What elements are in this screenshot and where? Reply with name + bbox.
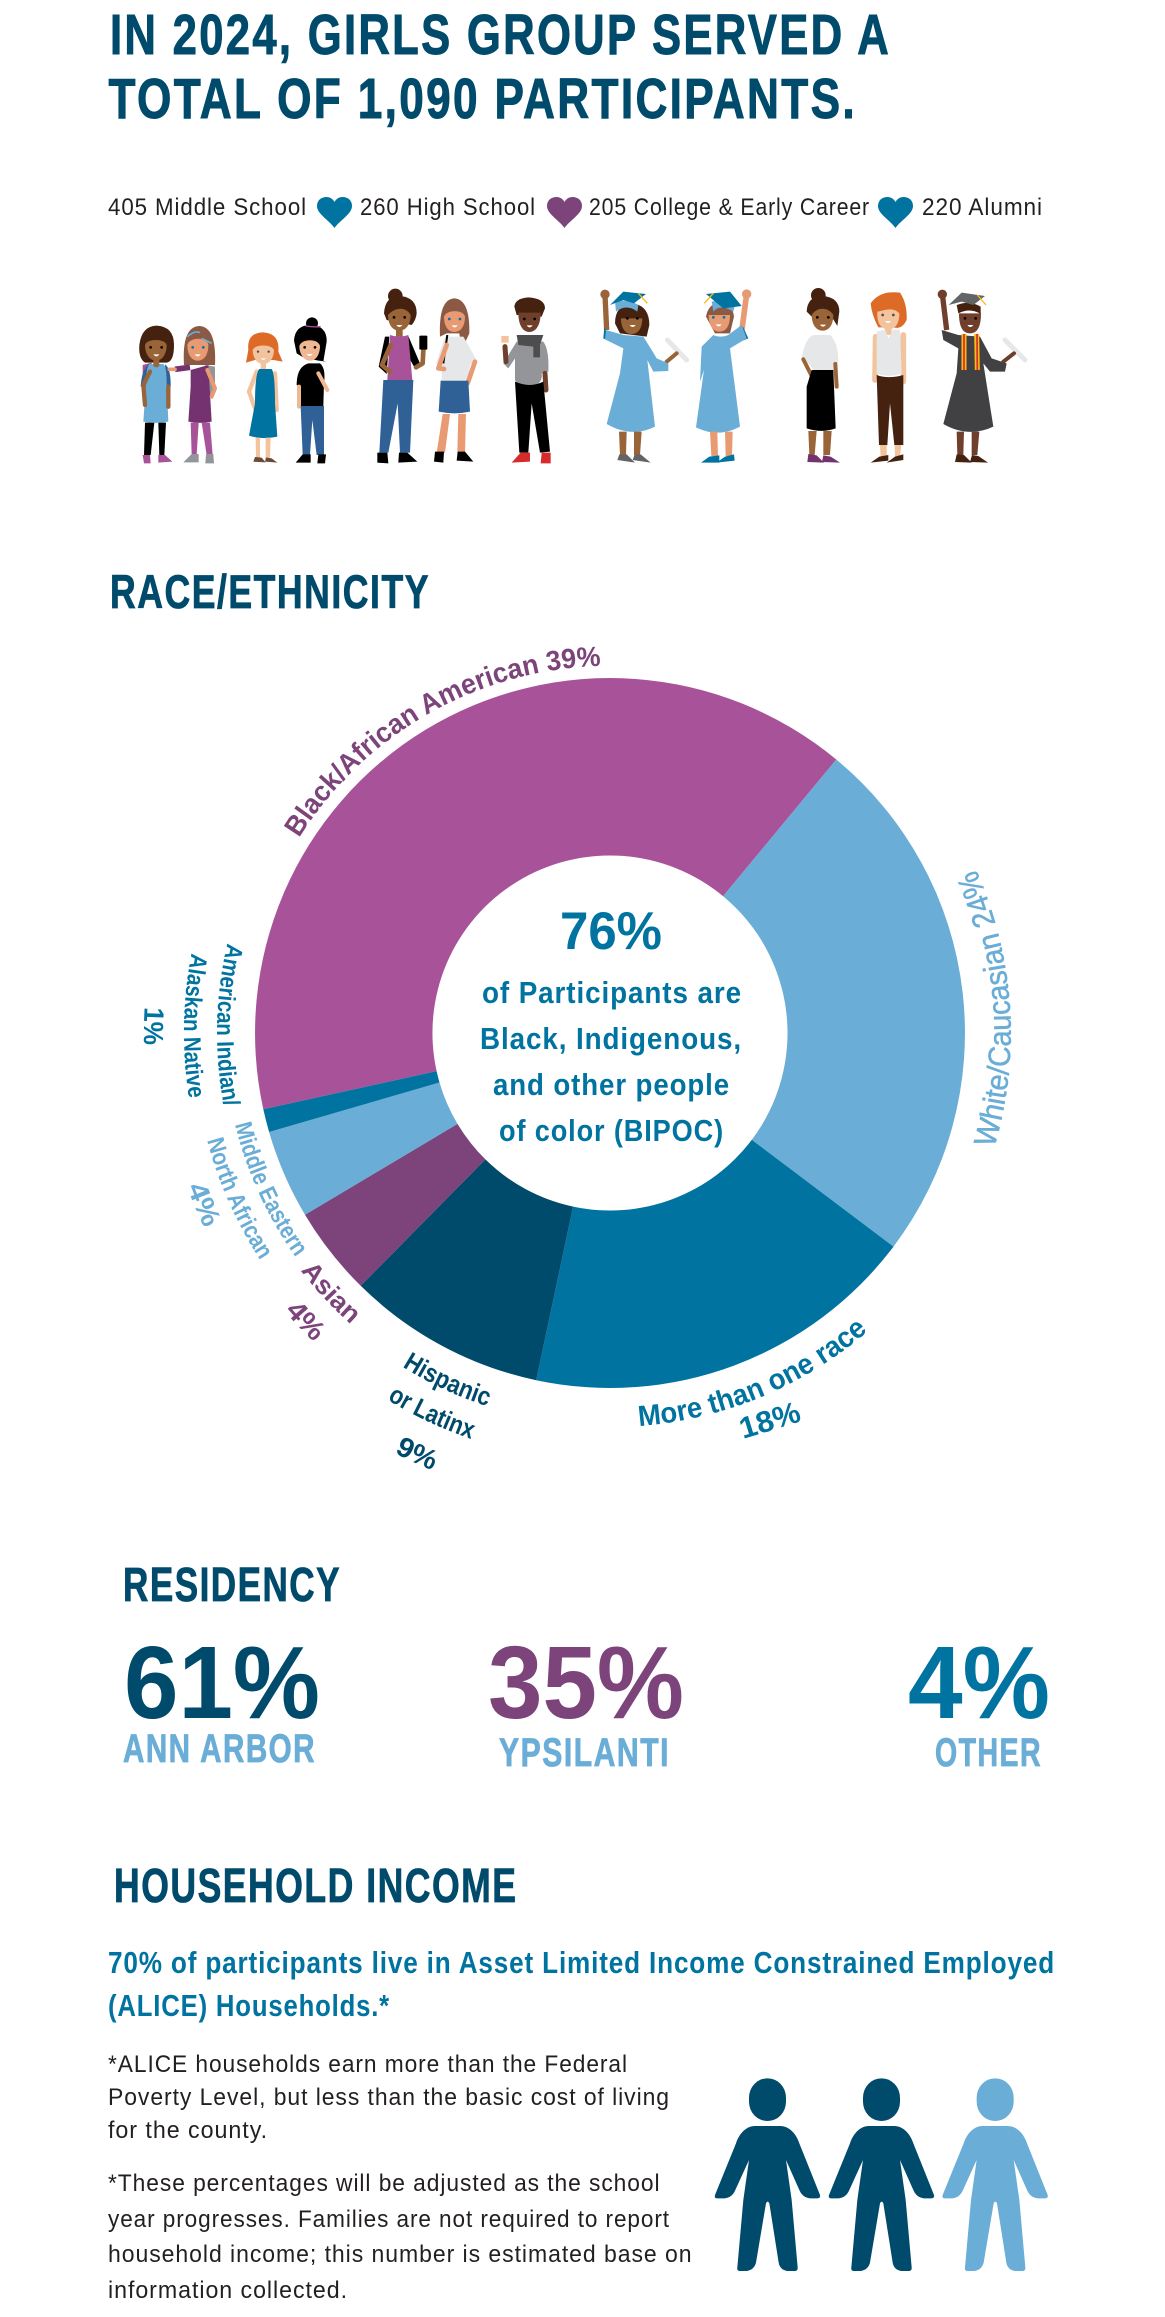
figure: alumna with orange hair xyxy=(871,292,907,463)
stat: Other 4%: 4% xyxy=(908,1625,1050,1740)
ALICE statement: (ALICE) Households.* xyxy=(108,1988,390,2023)
label: Hispanic or Latinx 9%: 9% xyxy=(397,1438,436,1469)
illustration: group of twelve participants xyxy=(139,288,1025,463)
label: Middle Eastern North African 4% xyxy=(190,1122,304,1260)
note: ALICE definition: Poverty Level, but less than the basic cost of living xyxy=(108,2084,670,2111)
segment: More than one race 18% xyxy=(536,1140,894,1388)
figure: teen in gray top and red shoes xyxy=(501,297,551,463)
count: alumni: 220 Alumni xyxy=(922,194,1043,221)
donut centre callout: of Participants are xyxy=(482,975,742,1010)
note: ALICE definition: *ALICE households earn more than the Federal xyxy=(108,2051,628,2078)
note: percentages disclaimer: *These percentages will be adjusted as the school xyxy=(108,2170,660,2197)
figure: alumna in black skirt xyxy=(802,288,840,463)
label: American Indian/Alaskan Native 1%: American Indian/ xyxy=(216,944,242,1104)
segment: Middle Eastern North African 4% xyxy=(269,1082,458,1215)
donut centre callout: of color (BIPOC) xyxy=(499,1113,724,1148)
icon: person dark xyxy=(829,2078,934,2271)
chart: race/ethnicity donut xyxy=(255,678,965,1388)
label: White/Caucasian 24%: White/Caucasian 24% xyxy=(958,872,1012,1143)
label: Hispanic or Latinx 9% xyxy=(390,1352,490,1469)
count: middle school: 405 Middle School xyxy=(108,194,307,221)
label: Middle Eastern North African 4%: Middle Eastern xyxy=(235,1122,304,1256)
figures: college graduates and alumni xyxy=(600,288,1025,463)
figure: girl in purple dress xyxy=(169,326,215,463)
icon: person dark xyxy=(715,2078,820,2271)
ALICE statement xyxy=(108,1945,1055,2023)
note: percentages disclaimer: information collected. xyxy=(108,2277,348,2304)
stat: Ann Arbor 61%: 61% xyxy=(124,1625,320,1740)
stat: Ann Arbor 61%: ANN ARBOR xyxy=(123,1727,316,1771)
stat: Ypsilanti 35%: YPSILANTI xyxy=(499,1731,670,1775)
heading: race/ethnicity: RACE/ETHNICITY xyxy=(110,565,430,618)
label: American Indian/Alaskan Native 1% xyxy=(144,944,242,1104)
icon: plum heart xyxy=(547,197,582,228)
heading: residency: RESIDENCY xyxy=(123,1559,341,1612)
title: IN 2024, GIRLS GROUP SERVED A xyxy=(110,3,891,67)
icon: teal heart xyxy=(317,197,352,228)
donut centre callout: and other people xyxy=(493,1067,730,1102)
donut centre callout: 76% xyxy=(560,902,662,961)
title xyxy=(108,3,891,131)
note: percentages disclaimer: year progresses. Families are not required to report xyxy=(108,2206,670,2233)
note: percentages disclaimer xyxy=(108,2170,692,2304)
segment: American Indian/Alaskan Native 1% xyxy=(263,1071,440,1132)
icon: teal heart xyxy=(878,197,913,228)
segment: White/Caucasian 24% xyxy=(723,760,965,1247)
figure: girl in black top and jeans xyxy=(294,317,327,463)
heading: household income: HOUSEHOLD INCOME xyxy=(114,1860,518,1913)
label: More than one race 18%: 18% xyxy=(735,1396,804,1446)
figure: graduate with raised arm xyxy=(696,289,751,463)
figure: graduate in dark gown xyxy=(938,290,1025,463)
label: More than one race 18%: More than one race xyxy=(638,1322,866,1426)
participant counts legend xyxy=(108,194,1043,228)
figure: girl in teal dress xyxy=(246,332,283,463)
count: college and early career: 205 College & Early Career xyxy=(589,194,870,221)
stat: Ypsilanti 35%: 35% xyxy=(488,1625,684,1740)
label: Hispanic or Latinx 9%: Hispanic xyxy=(404,1352,490,1405)
count: high school: 260 High School xyxy=(360,194,536,221)
figure: teen in white shirt and blue skirt xyxy=(434,298,477,463)
label: American Indian/Alaskan Native 1%: 1% xyxy=(144,1008,164,1044)
label: Hispanic or Latinx 9%: or Latinx xyxy=(390,1390,476,1439)
figure: graduate in light blue gown xyxy=(600,290,687,463)
note: percentages disclaimer: household income; this number is estimated base on xyxy=(108,2241,692,2268)
donut centre callout xyxy=(480,902,742,1148)
label: American Indian/Alaskan Native 1%: Alaskan Native xyxy=(184,954,207,1098)
label: Middle Eastern North African 4%: North African xyxy=(207,1137,270,1260)
title: TOTAL OF 1,090 PARTICIPANTS. xyxy=(108,67,857,131)
figure: teen in purple shirt with phone xyxy=(377,289,427,463)
label: Asian 4%: Asian xyxy=(301,1265,358,1324)
label: Black/African American 39%: Black/African American 39% xyxy=(284,646,600,836)
figure: girl in light blue dress xyxy=(139,326,174,463)
figures: middle and high school xyxy=(139,289,551,463)
donut centre callout: Black, Indigenous, xyxy=(480,1021,742,1056)
stat: Other 4%: OTHER xyxy=(935,1731,1042,1775)
segment: Asian 4% xyxy=(305,1124,485,1286)
label: Asian 4%: 4% xyxy=(288,1305,324,1340)
segment: Hispanic or Latinx 9% xyxy=(361,1159,573,1380)
label: Middle Eastern North African 4%: 4% xyxy=(190,1184,220,1226)
segment: Black/African American 39% xyxy=(255,678,836,1109)
label: Asian 4% xyxy=(288,1265,358,1340)
icons: three people, two of three in ALICE households xyxy=(715,2078,1048,2271)
note: ALICE definition xyxy=(108,2051,670,2144)
note: ALICE definition: for the county. xyxy=(108,2117,268,2144)
icon: person light xyxy=(942,2078,1048,2271)
